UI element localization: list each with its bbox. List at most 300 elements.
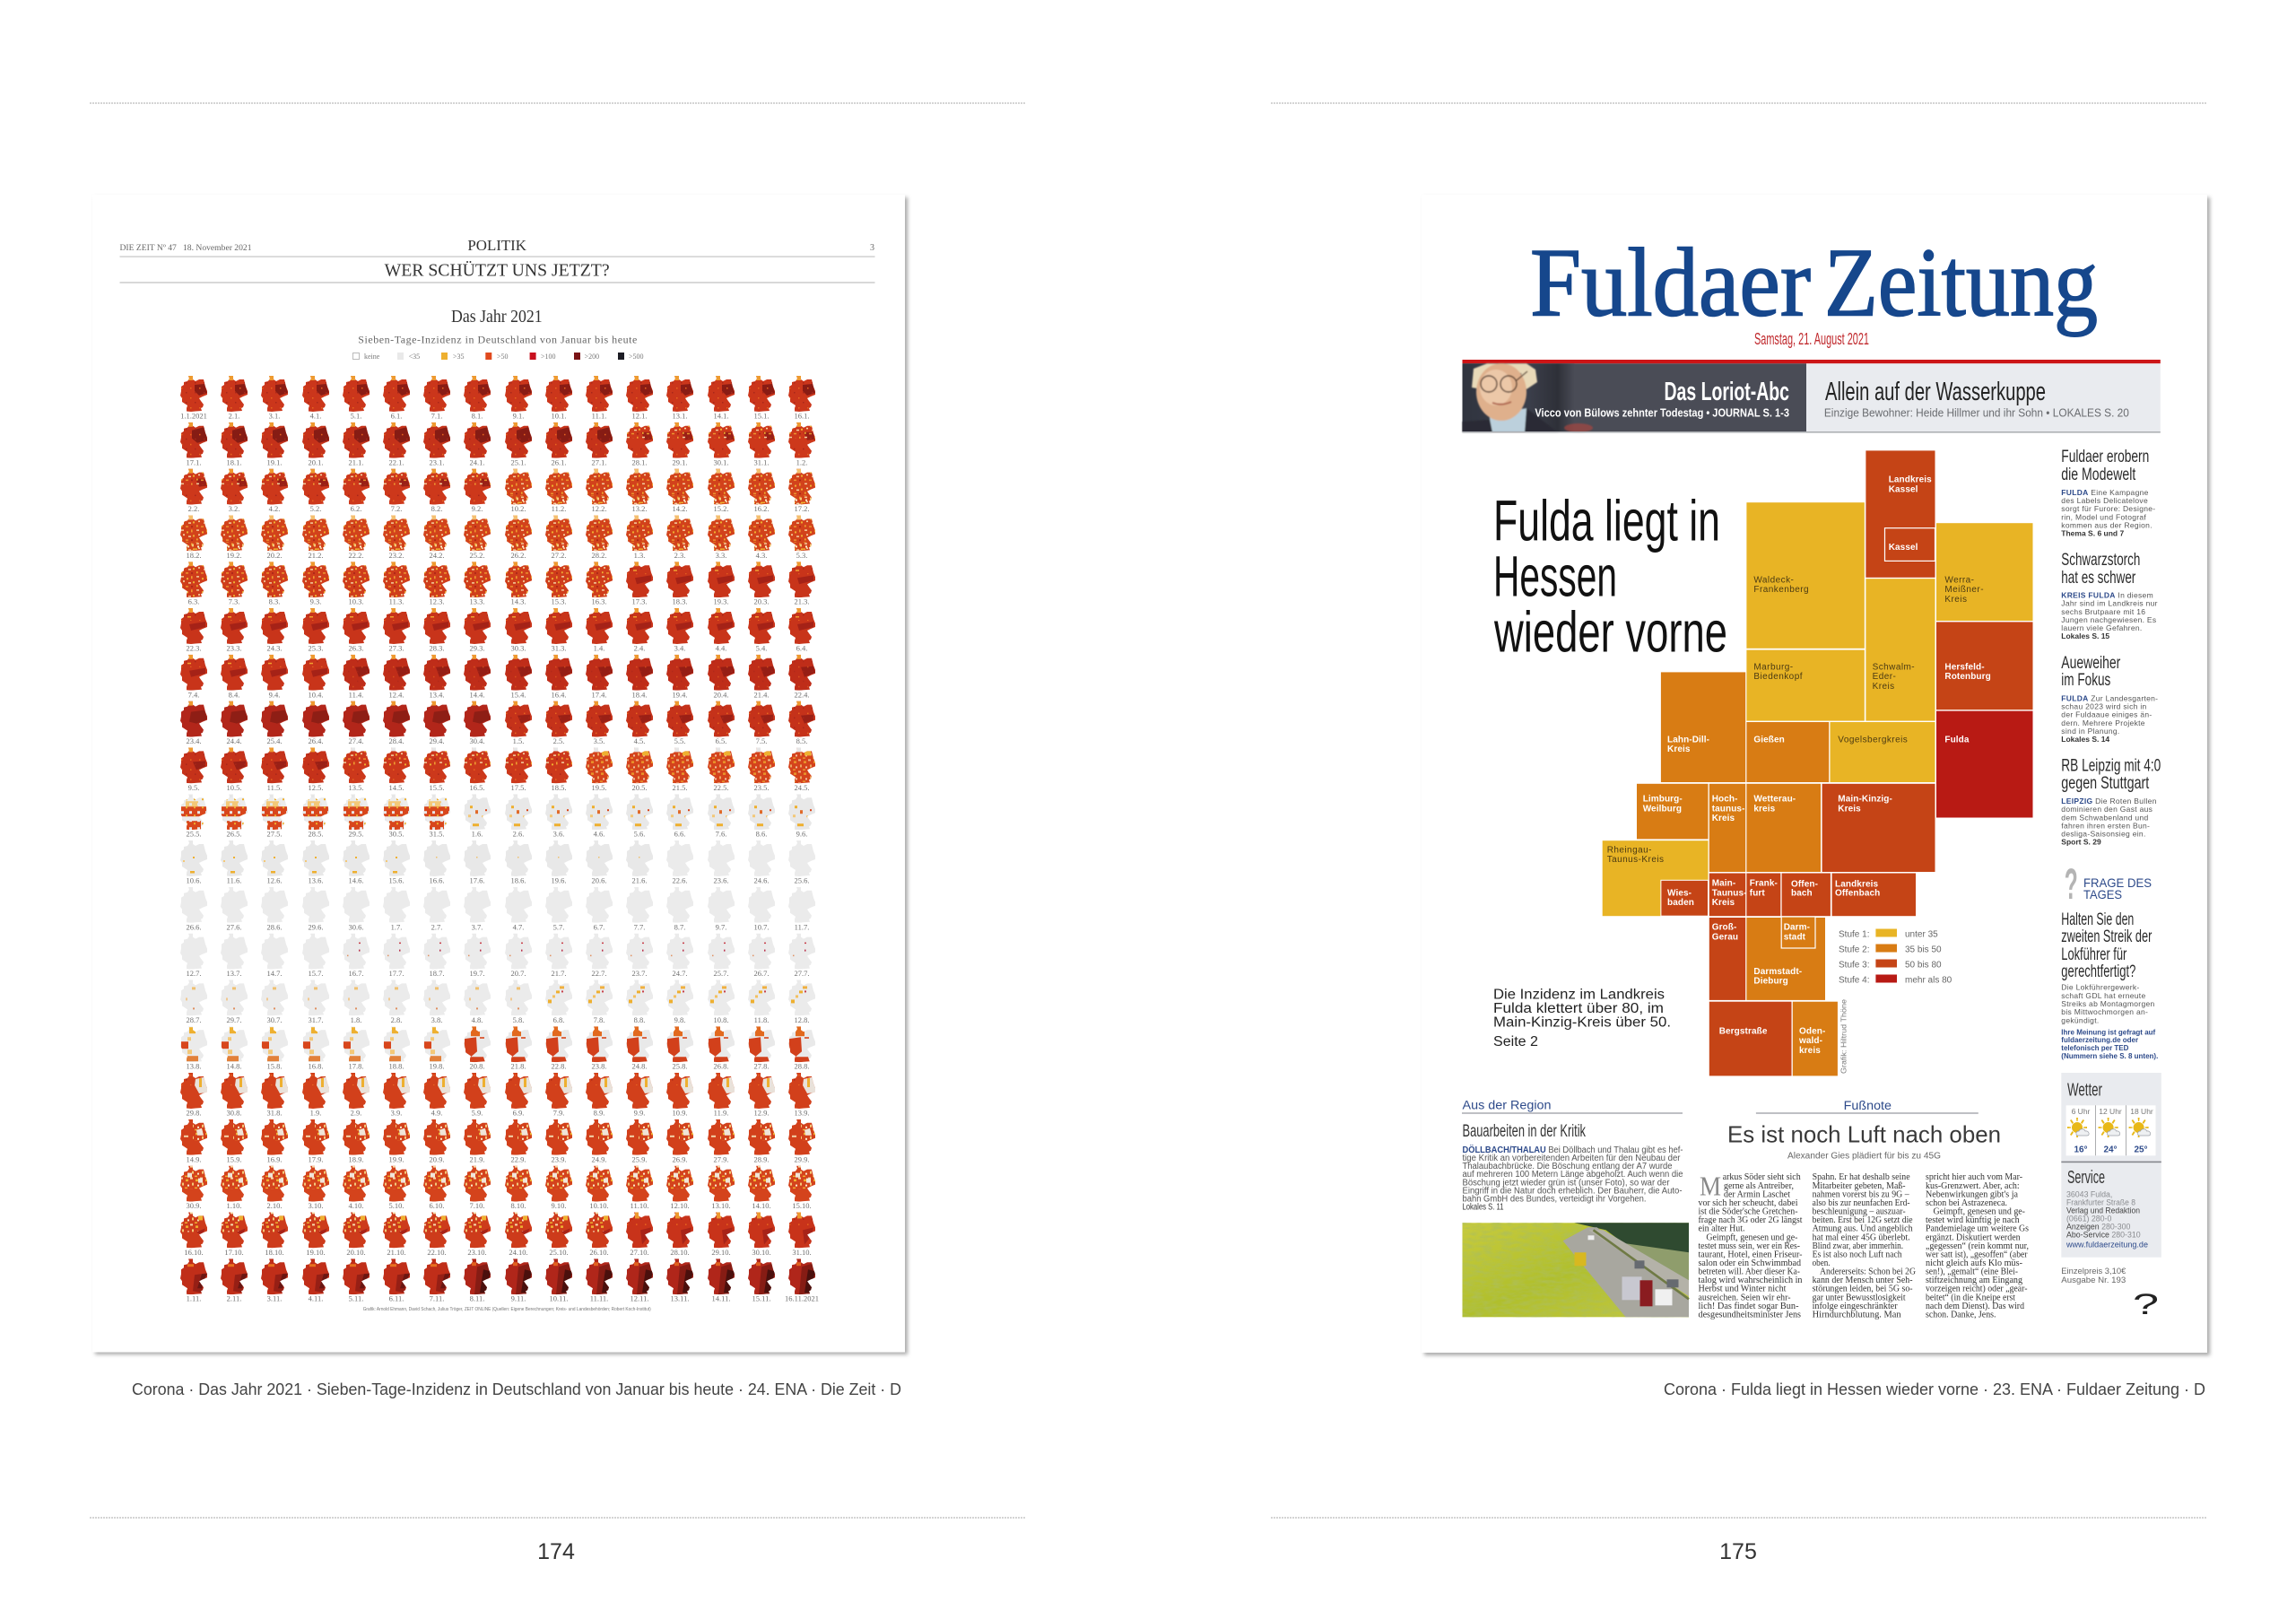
map row: 26.6. to 11.7.: 28.6. (267, 922, 282, 931)
weather table: 16° (2074, 1145, 2088, 1155)
map row: 30.9. to 15.10.: 30.9. (187, 1201, 201, 1210)
article text: column 3: schon. Danke, Jens. (1926, 1309, 1996, 1319)
map row: 12.7. to 27.7.: 15.7. (309, 969, 323, 978)
district labels: Taunus-Kreis (1607, 855, 1664, 865)
map row: 14.9. to 29.9.: 17.9. (309, 1154, 323, 1163)
map row: 25.5. to 9.6.: 27.5. (267, 830, 282, 839)
district labels: Kreis (1838, 805, 1861, 814)
map row: 6.3. to 21.3.: 6.3. (188, 597, 199, 606)
red rule (1462, 360, 2161, 363)
map row: 12.7. to 27.7.: 13.7. (226, 969, 242, 978)
district labels: kreis (1799, 1046, 1821, 1056)
map row: 9.5. to 24.5.: 15.5. (429, 783, 445, 792)
masthead: Fuldaer Zeitung (1530, 229, 2098, 337)
map row: 22.3. to 6.4.: 30.3. (511, 644, 526, 653)
sidebar teaser: RB Leipzig: RB Leipzig mit 4:0 (2061, 756, 2161, 776)
map row: 28.7. to 12.8.: 7.8. (594, 1015, 604, 1024)
map row: 1.11. to 16.11.2021: 1.11. (187, 1294, 201, 1303)
article text: column 2: Es ist also noch Luft nach (1813, 1249, 1902, 1259)
article text: column 2: Atmung aus. Und angeblich (1813, 1223, 1913, 1234)
map row: 30.9. to 15.10.: 10.10. (589, 1201, 609, 1210)
map row: 22.3. to 6.4.: 3.4. (674, 644, 685, 653)
map row: 13.8. to 28.8.: 23.8. (592, 1062, 606, 1071)
weather title: Wetter (2067, 1081, 2102, 1101)
map row: 25.5. to 9.6. (180, 794, 815, 839)
district labels: Taunus- (1712, 888, 1747, 898)
map row: 22.3. to 6.4.: 26.3. (348, 644, 364, 653)
map row: 29.8. to 13.9.: 13.9. (795, 1109, 809, 1118)
map row: 26.6. to 11.7.: 9.7. (716, 922, 726, 931)
map row: 6.3. to 21.3.: 20.3. (753, 597, 770, 606)
chart title: Das Jahr 2021: Das Jahr 2021 (451, 307, 543, 327)
map row: 1.1. to 16.1.: 4.1. (310, 411, 321, 420)
sidebar teaser: Aueweiher im Fokus: sind in Planung. (2061, 727, 2120, 736)
map row: 29.8. to 13.9.: 11.9. (714, 1109, 728, 1118)
map row: 22.3. to 6.4.: 28.3. (429, 644, 445, 653)
question of the day text: fuldaerzeitung.de oder (2061, 1036, 2138, 1044)
question of the day text: zweiten Streik der (2061, 927, 2152, 946)
article text: column 3: kus-Grenzwert. Aber, ach: (1926, 1180, 2020, 1191)
sidebar teaser: RB Leipzig: LEIPZIG Die Roten Bullen (2061, 797, 2157, 806)
map row: 9.5. to 24.5.: 9.5. (188, 783, 199, 792)
map row: 17.1. to 1.2.: 27.1. (592, 457, 606, 466)
map row: 6.3. to 21.3. (180, 562, 815, 606)
map row: 13.8. to 28.8.: 19.8. (429, 1062, 445, 1071)
map row: 26.6. to 11.7. (180, 887, 815, 931)
map row: 18.2. to 5.3.: 20.2. (267, 551, 282, 560)
icon: large question mark: ? (2133, 1288, 2159, 1320)
district labels: Gerau (1712, 932, 1738, 942)
page number 175: 175 (1719, 1539, 1757, 1564)
map row: 1.11. to 16.11.2021: 3.11. (267, 1294, 282, 1303)
page header: Die Zeit (120, 237, 875, 283)
map row: 18.2. to 5.3.: 28.2. (592, 551, 606, 560)
map row: 23.4. to 8.5.: 29.4. (429, 736, 445, 745)
map row: 26.6. to 11.7.: 6.7. (594, 922, 604, 931)
map row: 29.8. to 13.9.: 2.9. (351, 1109, 361, 1118)
legend: incidence classes: keine (364, 353, 380, 361)
small multiple maps: 320 days (180, 376, 819, 1303)
map row: 6.3. to 21.3.: 17.3. (631, 597, 648, 606)
map row: 12.7. to 27.7.: 20.7. (511, 969, 526, 978)
district labels: Kreis (1944, 595, 1967, 605)
map row: 1.1. to 16.1.: 10.1. (551, 411, 567, 420)
question of the day text: Die Lokführergewerk- (2061, 983, 2140, 992)
legend: Stufen: Stufe 3: (1839, 960, 1869, 971)
sidebar teaser: Schwarzstorch hat es schwer: Jungen nachgewiesen. Es (2061, 615, 2156, 624)
map row: 10.6. to 25.6.: 23.6. (714, 875, 728, 884)
map row: 1.11. to 16.11.2021: 10.11. (550, 1294, 568, 1303)
legend: Stufen: 35 bis 50 (1905, 945, 1942, 954)
map row: 2.2. to 17.2.: 9.2. (472, 504, 483, 513)
article text: column 1: testet muss sein, wer ein Res- (1699, 1241, 1800, 1251)
map row: 17.1. to 1.2.: 26.1. (551, 457, 567, 466)
map row: 26.6. to 11.7.: 4.7. (513, 922, 524, 931)
chart credit: Grafik: Arnold Ehmann, David Schach, Julius Tröger, ZEIT ONLINE (Quellen: Eigene Berechnungen; Kreis- und Landesbehörden; Robert Koch-Institut) (363, 1307, 651, 1312)
map row: 7.4. to 22.4.: 9.4. (269, 690, 280, 699)
map row: 14.9. to 29.9.: 27.9. (714, 1154, 728, 1163)
map row: 6.3. to 21.3.: 10.3. (348, 597, 364, 606)
section: Aus der Region: Aus der Region (1462, 1099, 1552, 1112)
map row: 30.9. to 15.10.: 14.10. (752, 1201, 771, 1210)
map row: 9.5. to 24.5. (180, 747, 815, 792)
map row: 17.1. to 1.2.: 19.1. (267, 457, 282, 466)
sidebar teaser: Fuldaer erobern die Modewelt: kommen aus der Region. (2061, 520, 2152, 529)
map row: 26.6. to 11.7.: 2.7. (431, 922, 442, 931)
sidebar teaser: Schwarzstorch hat es schwer: Lokales S. 15 (2061, 631, 2109, 640)
district labels: Weilburg (1643, 805, 1682, 814)
map row: 13.8. to 28.8.: 22.8. (551, 1062, 567, 1071)
map row: 9.5. to 24.5.: 11.5. (267, 783, 282, 792)
map row: 14.9. to 29.9.: 23.9. (551, 1154, 567, 1163)
map row: 28.7. to 12.8.: 11.8. (754, 1015, 769, 1024)
article text: column 1: salon oder ein Schwimmbad (1699, 1258, 1801, 1268)
district labels: Offenbach (1835, 889, 1880, 899)
article text: column 3: nicht gleich aufs Klo müs- (1926, 1258, 2022, 1268)
map row: 13.8. to 28.8.: 27.8. (753, 1062, 770, 1071)
article text: column 1: talog wird wahrscheinlich in (1699, 1275, 1803, 1285)
teaser banner: Das Loriot-Abc (1462, 363, 1806, 432)
sidebar teaser: Fuldaer erobern die Modewelt: Thema S. 6 und 7 (2061, 529, 2124, 538)
map row: 12.7. to 27.7.: 26.7. (753, 969, 770, 978)
sidebar teaser: RB Leipzig: gegen Stuttgart (2061, 773, 2150, 793)
article text: column 1: betreten will. Aber dieser Ka- (1699, 1267, 1800, 1277)
map row: 9.5. to 24.5.: 21.5. (673, 783, 687, 792)
article text: column 2: Spahn. Er hat deshalb seine (1813, 1171, 1910, 1182)
map row: 25.5. to 9.6.: 26.5. (226, 830, 242, 839)
weather table: 18 Uhr (2130, 1107, 2153, 1116)
sidebar teaser: Fuldaer erobern die Modewelt: sorgt für Furore: Designe- (2061, 504, 2155, 513)
map row: 17.1. to 1.2.: 20.1. (309, 457, 323, 466)
map row: 16.10. to 31.10.: 26.10. (589, 1248, 609, 1257)
sidebar teaser: Schwarzstorch hat es schwer (2061, 550, 2158, 640)
article text: column 2: Andererseits: Schon bei 2G (1820, 1267, 1916, 1277)
icon: portrait photo of Loriot (1462, 363, 1593, 432)
district labels: Darm- (1784, 922, 1810, 932)
question of the day text (2061, 910, 2158, 1060)
map row: 17.1. to 1.2.: 29.1. (673, 457, 687, 466)
article text: column 2: beschleunigung – auszuar- (1813, 1206, 1906, 1217)
map row: 7.4. to 22.4.: 22.4. (795, 690, 809, 699)
service contact details: Verlag und Redaktion (2066, 1206, 2140, 1215)
price and issue: Einzelpreis 3,10€ (2061, 1267, 2126, 1276)
map row: 28.7. to 12.8.: 5.8. (513, 1015, 524, 1024)
map row: 13.8. to 28.8. (180, 1026, 815, 1071)
region headline: Bauarbeiten in der Kritik (1462, 1122, 1586, 1141)
article text: column 2: oben. (1813, 1258, 1831, 1268)
map row: 16.10. to 31.10.: 16.10. (184, 1248, 204, 1257)
service contact details: www.fuldaerzeitung.de (2066, 1241, 2148, 1250)
sidebar teaser: Schwarzstorch hat es schwer: KREIS FULDA In diesem (2061, 590, 2153, 599)
legend: incidence classes: >35 (453, 353, 465, 361)
lead text: Fulda klettert über 80, im (1493, 1001, 1664, 1016)
sidebar teaser: Schwarzstorch hat es schwer: Schwarzstorch (2061, 550, 2140, 570)
map row: 14.9. to 29.9.: 22.9. (511, 1154, 526, 1163)
region article text: bahn GmbH des Bundes, verteidigt ihr Vorgehen. (1462, 1195, 1647, 1205)
map row: 26.6. to 11.7.: 29.6. (309, 922, 323, 931)
article text: column 3: stiftzeichnung am Eingang (1926, 1275, 2022, 1285)
map row: 23.4. to 8.5.: 5.5. (674, 736, 685, 745)
map row: 30.9. to 15.10.: 12.10. (670, 1201, 690, 1210)
map row: 16.10. to 31.10.: 27.10. (630, 1248, 649, 1257)
map row: 29.8. to 13.9.: 3.9. (391, 1109, 402, 1118)
map row: 2.2. to 17.2.: 3.2. (229, 504, 239, 513)
caption: left page: Corona · Das Jahr 2021 · Sieben-Tage-Inzidenz in Deutschland von Januar bis heute · 24. ENA · Die Zeit · D (132, 1380, 901, 1398)
map row: 18.2. to 5.3.: 23.2. (389, 551, 404, 560)
question of the day text: Streiks ab Montagmorgen (2061, 999, 2155, 1008)
article text: column 2: hat mal einer 45G überlebt. (1813, 1232, 1910, 1242)
map row: 2.2. to 17.2.: 13.2. (631, 504, 648, 513)
legend: incidence classes: >50 (497, 353, 509, 361)
map row: 6.3. to 21.3.: 15.3. (551, 597, 567, 606)
map row: 12.7. to 27.7.: 17.7. (389, 969, 404, 978)
sidebar teaser: Fuldaer erobern die Modewelt: Fuldaer erobern (2061, 447, 2149, 466)
district labels: Vogelsbergkreis (1838, 736, 1908, 745)
section: Fußnote (1727, 1099, 2001, 1162)
map row: 7.4. to 22.4.: 11.4. (349, 690, 363, 699)
service contact details: 36043 Fulda, (2066, 1190, 2112, 1199)
map row: 22.3. to 6.4.: 27.3. (389, 644, 404, 653)
map row: 12.7. to 27.7.: 25.7. (714, 969, 728, 978)
map row: 30.9. to 15.10.: 3.10. (309, 1201, 323, 1210)
map row: 12.7. to 27.7.: 24.7. (673, 969, 687, 978)
district labels: kreis (1753, 805, 1776, 814)
heading: Frage des Tages: FRAGE DES (2083, 875, 2152, 890)
map row: 14.9. to 29.9.: 25.9. (631, 1154, 648, 1163)
map row: 29.8. to 13.9.: 31.8. (267, 1109, 282, 1118)
district labels: Kassel (1889, 484, 1918, 494)
map row: 1.1. to 16.1.: 8.1. (472, 411, 483, 420)
map row: 1.1. to 16.1.: 9.1. (513, 411, 524, 420)
map row: 28.7. to 12.8. (180, 980, 815, 1024)
article text: column 2 (1813, 1171, 1916, 1319)
map row: 1.11. to 16.11.2021: 2.11. (227, 1294, 241, 1303)
article text: column 1: ist die Söder'sche Gretchen- (1699, 1206, 1798, 1217)
region article text: Thalaubachbrücke. Die Böschung entlang der A7 wurde (1462, 1162, 1673, 1171)
map row: 14.9. to 29.9.: 18.9. (348, 1154, 364, 1163)
map row: 18.2. to 5.3.: 19.2. (226, 551, 242, 560)
teaser banner: Allein auf der Wasserkuppe: Allein auf der Wasserkuppe (1825, 378, 2046, 406)
map row: 26.6. to 11.7.: 30.6. (348, 922, 364, 931)
district labels: Frankenberg (1753, 585, 1809, 595)
map row: 30.9. to 15.10.: 5.10. (389, 1201, 404, 1210)
map row: 7.4. to 22.4.: 13.4. (429, 690, 445, 699)
map row: 12.7. to 27.7.: 22.7. (592, 969, 606, 978)
map row: 23.4. to 8.5.: 24.4. (226, 736, 242, 745)
heading: Frage des Tages: TAGES (2083, 887, 2122, 901)
map row: 10.6. to 25.6.: 19.6. (551, 875, 567, 884)
map row: 2.2. to 17.2.: 8.2. (431, 504, 442, 513)
map row: 14.9. to 29.9.: 26.9. (673, 1154, 687, 1163)
district labels: Main- (1712, 879, 1735, 889)
map row: 16.10. to 31.10.: 25.10. (549, 1248, 569, 1257)
map row: 1.11. to 16.11.2021: 15.11. (752, 1294, 770, 1303)
map row: 30.9. to 15.10.: 1.10. (226, 1201, 242, 1210)
map row: 25.5. to 9.6.: 6.6. (674, 830, 685, 839)
weather table: 12 Uhr (2099, 1107, 2122, 1116)
page number 174: 174 (537, 1539, 575, 1564)
map row: 18.2. to 5.3.: 3.3. (716, 551, 726, 560)
map row: 25.5. to 9.6.: 8.6. (756, 830, 767, 839)
map row: 18.2. to 5.3.: 1.3. (634, 551, 645, 560)
map row: 1.11. to 16.11.2021 (180, 1258, 819, 1303)
map row: 9.5. to 24.5.: 12.5. (309, 783, 323, 792)
legend: incidence classes: >100 (541, 353, 556, 361)
map row: 30.9. to 15.10.: 15.10. (792, 1201, 812, 1210)
map row: 1.11. to 16.11.2021: 8.11. (470, 1294, 484, 1303)
panel: weather and service box (2061, 1073, 2161, 1258)
article text: column 3: Pandemielage um weitere Gs (1926, 1223, 2029, 1234)
map row: 26.6. to 11.7.: 11.7. (795, 922, 809, 931)
page header: Die Zeit: 3 (870, 243, 874, 253)
map row: 1.11. to 16.11.2021: 14.11. (712, 1294, 730, 1303)
map row: 6.3. to 21.3.: 12.3. (429, 597, 445, 606)
map row: 1.1. to 16.1.: 14.1. (714, 411, 728, 420)
district labels: Waldeck- (1753, 575, 1794, 585)
map row: 23.4. to 8.5.: 27.4. (348, 736, 364, 745)
map row: 2.2. to 17.2.: 16.2. (753, 504, 770, 513)
map row: 2.2. to 17.2.: 6.2. (351, 504, 361, 513)
district labels: Eder- (1873, 672, 1896, 682)
article text: column 2: infolge eingeschränkter (1813, 1301, 1898, 1311)
article text: column 3: spricht hier auch vom Mar- (1926, 1171, 2022, 1182)
map row: 13.8. to 28.8.: 14.8. (226, 1062, 242, 1071)
article text: column 1: vor sich her scheucht, dabei (1699, 1197, 1797, 1208)
question of the day text: Ihre Meinung ist gefragt auf (2061, 1028, 2156, 1037)
map row: 17.1. to 1.2.: 17.1. (187, 457, 201, 466)
article text: column 2: nahmen vorerst bis zu 9G – (1813, 1189, 1909, 1200)
map row: 29.8. to 13.9.: 10.9. (673, 1109, 687, 1118)
service contact details: Anzeigen 280-300 (2066, 1222, 2131, 1231)
main headline: wieder vorne (1493, 599, 1727, 664)
legend: Stufen: unter 35 (1905, 929, 1938, 940)
map row: 7.4. to 22.4.: 15.4. (511, 690, 526, 699)
page header: Die Zeit: DIE ZEIT Nº 47 18. November 2021 (120, 244, 252, 253)
sidebar teaser: RB Leipzig: fahren ihren ersten Bun- (2061, 822, 2150, 831)
article text: column 1: der Armin Laschet (1724, 1189, 1790, 1200)
map row: 23.4. to 8.5.: 2.5. (553, 736, 564, 745)
map row: 22.3. to 6.4.: 5.4. (756, 644, 767, 653)
service contact details (2066, 1190, 2148, 1250)
map row: 9.5. to 24.5.: 10.5. (226, 783, 242, 792)
article text: column 1 (1699, 1170, 1803, 1319)
map row: 28.7. to 12.8.: 10.8. (714, 1015, 728, 1024)
sidebar teaser: Fuldaer erobern die Modewelt: rin, Model und Fotograf (2061, 512, 2146, 521)
map row: 30.9. to 15.10.: 13.10. (711, 1201, 731, 1210)
region article text: tige Kritik an vorbereitenden Arbeiten für den Neubau der (1462, 1154, 1681, 1163)
page header: Die Zeit: POLITIK (467, 237, 527, 254)
map row: 7.4. to 22.4.: 14.4. (470, 690, 484, 699)
district labels (1607, 475, 1991, 1056)
main headline: Fulda liegt in (1493, 488, 1720, 553)
map row: 16.10. to 31.10.: 28.10. (670, 1248, 690, 1257)
map row: 22.3. to 6.4.: 23.3. (226, 644, 242, 653)
map row: 1.1. to 16.1.: 5.1. (351, 411, 361, 420)
weather table: 24° (2103, 1145, 2118, 1155)
sidebar teaser: RB Leipzig: desliga-Saisonsieg ein. (2061, 830, 2146, 839)
article text: column 1: frage nach 3G oder 2G längst (1699, 1215, 1803, 1225)
service contact details: Frankfurter Straße 8 (2066, 1198, 2135, 1207)
article text: column 1: M (1700, 1170, 1721, 1202)
sidebar teaser: Schwarzstorch hat es schwer: sechs Brutpaare mit 16 (2061, 607, 2145, 616)
district labels: Rheingau- (1607, 845, 1652, 856)
map row: 10.6. to 25.6. (180, 840, 815, 884)
map row: 10.6. to 25.6.: 12.6. (267, 875, 282, 884)
map row: 7.4. to 22.4.: 7.4. (188, 690, 199, 699)
map row: 28.7. to 12.8.: 30.7. (267, 1015, 282, 1024)
legend: incidence classes (353, 353, 644, 361)
map row: 25.5. to 9.6.: 9.6. (796, 830, 807, 839)
map row: 18.2. to 5.3.: 24.2. (429, 551, 445, 560)
service contact details: Abo-Service 280-310 (2066, 1230, 2141, 1239)
map row: 10.6. to 25.6.: 13.6. (309, 875, 323, 884)
map row: 1.1. to 16.1.: 7.1. (431, 411, 442, 420)
map row: 7.4. to 22.4.: 19.4. (673, 690, 687, 699)
district labels: Biedenkopf (1753, 672, 1803, 682)
map row: 1.11. to 16.11.2021: 9.11. (511, 1294, 526, 1303)
map row: 23.4. to 8.5.: 28.4. (389, 736, 404, 745)
map row: 18.2. to 5.3.: 22.2. (348, 551, 364, 560)
map row: 10.6. to 25.6.: 11.6. (227, 875, 241, 884)
legend: Stufen: Stufe 4: (1839, 976, 1869, 985)
map row: 17.1. to 1.2.: 22.1. (389, 457, 404, 466)
map row: 2.2. to 17.2.: 15.2. (714, 504, 728, 513)
region article text: auf mehreren 100 Metern Länge abgeholzt. Auch wenn die (1462, 1170, 1683, 1180)
map row: 17.1. to 1.2.: 24.1. (470, 457, 484, 466)
map row: 6.3. to 21.3.: 7.3. (229, 597, 239, 606)
map row: 25.5. to 9.6.: 2.6. (513, 830, 524, 839)
map row: 2.2. to 17.2.: 7.2. (391, 504, 402, 513)
map row: 6.3. to 21.3.: 21.3. (795, 597, 809, 606)
map row: 1.1. to 16.1.: 3.1. (269, 411, 280, 420)
district labels: Wies- (1667, 888, 1692, 898)
map row: 6.3. to 21.3.: 19.3. (714, 597, 728, 606)
district labels: furt (1750, 888, 1765, 898)
map row: 23.4. to 8.5.: 4.5. (634, 736, 645, 745)
map row: 12.7. to 27.7.: 19.7. (470, 969, 484, 978)
district labels: taunus- (1712, 805, 1745, 814)
article text: column 2: Mitarbeiter gebeten, Maß- (1813, 1180, 1906, 1191)
map row: 14.9. to 29.9.: 28.9. (753, 1154, 770, 1163)
district labels: Darmstadt- (1753, 967, 1802, 977)
district labels: wald- (1798, 1036, 1822, 1046)
map row: 30.9. to 15.10.: 11.10. (631, 1201, 648, 1210)
article text: column 2: Blind zwar, aber immerhin. (1813, 1241, 1903, 1251)
map row: 26.6. to 11.7.: 7.7. (634, 922, 645, 931)
map row: 16.10. to 31.10.: 21.10. (387, 1248, 406, 1257)
map row: 22.3. to 6.4.: 4.4. (716, 644, 726, 653)
question of the day text: Lokführer für (2061, 945, 2127, 964)
main headline (1493, 488, 1727, 664)
map row: 1.1. to 16.1.: 12.1. (631, 411, 648, 420)
article text: column 3: Geimpft, genesen und ge- (1934, 1206, 2025, 1217)
icon: question mark: ? (2065, 861, 2078, 909)
district labels: Main-Kinzig- (1838, 795, 1892, 805)
sidebar teaser: Aueweiher im Fokus: im Fokus (2061, 670, 2110, 690)
map row: 29.8. to 13.9. (180, 1073, 815, 1118)
map row: 22.3. to 6.4.: 6.4. (796, 644, 807, 653)
map row: 14.9. to 29.9.: 20.9. (429, 1154, 445, 1163)
map row: 16.10. to 31.10. (180, 1212, 815, 1257)
graphic credit: Grafik: Hiltrud Thöne (1839, 999, 1848, 1074)
service contact details: (0661) 280-0 (2066, 1215, 2111, 1223)
map row: 30.9. to 15.10.: 6.10. (429, 1201, 445, 1210)
map row: 16.10. to 31.10.: 23.10. (467, 1248, 487, 1257)
map row: 28.7. to 12.8.: 3.8. (431, 1015, 442, 1024)
main headline: Hessen (1493, 544, 1617, 608)
article text: column 3: testet wird künftig je nach (1926, 1215, 2020, 1225)
map row: 17.1. to 1.2.: 21.1. (348, 457, 364, 466)
